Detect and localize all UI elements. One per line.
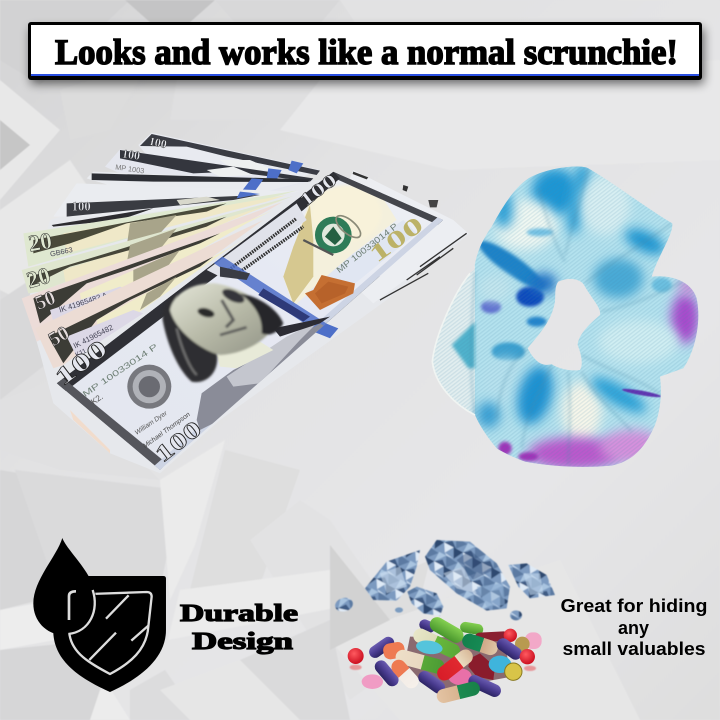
- note: first 50: IK 41965482 A: [58, 290, 109, 315]
- drop: [33, 538, 96, 635]
- note: second 20: [22, 196, 293, 294]
- tie-dye colour blobs: [474, 161, 699, 469]
- note: second 50: IK 41965482: [72, 323, 115, 350]
- note: front 100: 100: [150, 416, 207, 468]
- note: second 50: K11: [74, 348, 88, 359]
- blue security ribbon: [214, 256, 326, 332]
- treasury seal: [127, 365, 171, 409]
- note: front 100: William Dyer: [134, 410, 169, 437]
- face: [170, 283, 277, 355]
- main diamond: [425, 540, 510, 611]
- note: front 100: 100: [365, 212, 429, 268]
- note: top 100: 100: [148, 134, 168, 151]
- note: second 100: MP 1003: [115, 162, 145, 175]
- note numerals and serials: 100: [50, 335, 113, 391]
- hair left: [163, 293, 217, 382]
- icon: water drop and shield: [33, 538, 166, 692]
- note: fourth 100: [52, 183, 300, 227]
- money: fan of banknotes: [22, 133, 470, 473]
- note: front 100: 100: [295, 169, 341, 211]
- note: fourth 100: 100: [72, 200, 91, 214]
- title banner: [28, 22, 704, 84]
- note: front 100: MP 10033014 P: [81, 341, 160, 399]
- note: second 100: [105, 146, 313, 200]
- top border print: [333, 172, 443, 225]
- note: top 100: [138, 133, 320, 197]
- green treasury seal: [315, 217, 352, 253]
- pills: [348, 614, 542, 704]
- eyes and features: [196, 306, 215, 319]
- label: great for hiding: [560, 595, 708, 659]
- folds: [471, 168, 682, 465]
- label: great for hiding: any: [618, 617, 650, 638]
- note: third 100: [87, 172, 310, 198]
- Franklin portrait: [163, 283, 283, 382]
- left diamond: [365, 550, 420, 601]
- note: second 50: 50: [45, 322, 73, 351]
- right diamond: [508, 563, 555, 598]
- note: second 50: [35, 220, 263, 368]
- label: great for hiding: small valuables: [562, 638, 706, 659]
- label: Durable Design: Durable: [180, 601, 298, 627]
- scrunchie: [432, 166, 698, 467]
- note: first 20: 20: [27, 228, 54, 258]
- lower diamond: [407, 587, 443, 616]
- note: first 50: [22, 202, 283, 342]
- cream watermark panel: [283, 190, 397, 307]
- diamonds: [334, 540, 555, 620]
- back fold: [432, 265, 475, 422]
- note: second 100: 100: [121, 146, 141, 163]
- label: Durable Design: Design: [192, 629, 293, 655]
- shield: [53, 576, 166, 692]
- coat of Franklin: [197, 323, 330, 430]
- label: great for hiding: Great for hiding: [560, 595, 708, 616]
- small diamonds: [334, 596, 522, 620]
- orange inkwell patch: [305, 275, 355, 310]
- note: front 100: [50, 169, 443, 470]
- note: first 20: [23, 191, 297, 267]
- back stack of notes: [27, 180, 470, 473]
- note: second 20: 20: [24, 263, 53, 294]
- note: front 100: Michael Thompson: [142, 411, 192, 450]
- note: first 20: GB663: [49, 245, 73, 259]
- hair right: [240, 293, 283, 335]
- lower border: [57, 378, 167, 470]
- note: first 50: 50: [32, 287, 59, 315]
- note: first 50: K11: [57, 313, 72, 326]
- note: front 100: K2.: [89, 391, 105, 407]
- title text: Looks and works like a normal scrunchie!: [55, 32, 678, 72]
- note: front 100: MP 10033014 P: [334, 221, 400, 275]
- ribbed fabric texture: [433, 166, 698, 467]
- label: Durable Design: [180, 601, 298, 655]
